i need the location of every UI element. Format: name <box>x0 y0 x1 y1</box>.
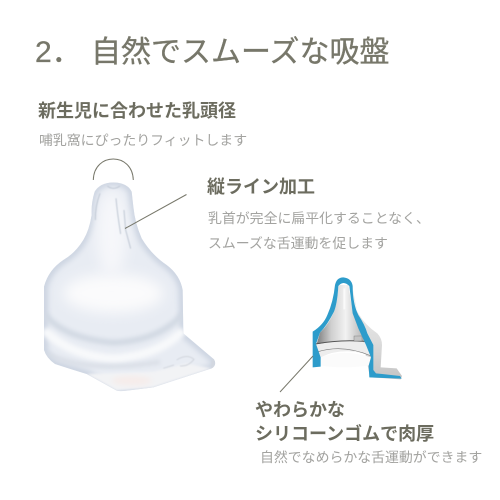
text: fits palate: 哺乳窩にぴったりフィットします <box>39 132 247 148</box>
illustration: cross-section of nipple <box>313 277 402 379</box>
section right outer surface <box>352 285 402 379</box>
section base ring <box>315 341 372 357</box>
section inner dome <box>317 285 365 344</box>
nipple vertical grooves <box>95 186 131 249</box>
section blue silicone wall <box>313 277 402 379</box>
leader line: thick silicone <box>280 356 313 392</box>
heading: soft thick silicone <box>255 400 434 444</box>
illustration: silicone nipple and cross-section <box>44 158 402 392</box>
text: natural tongue movement: 自然でなめらかな舌運動ができます <box>260 449 482 465</box>
nipple body <box>44 182 216 392</box>
heading: soft thick silicone: やわらかな <box>255 400 345 420</box>
text: vertical line description <box>208 210 430 251</box>
text: vertical line description: スムーズな舌運動を促します <box>208 235 388 251</box>
title: 2． <box>35 36 82 69</box>
heading: vertical line processing: 縦ライン加工 <box>207 177 315 197</box>
section centre groove <box>341 288 347 309</box>
nipple tab marking <box>163 356 194 368</box>
leader line: vertical groove <box>125 194 186 228</box>
heading: newborn nipple diameter: 新生児に合わせた乳頭径 <box>38 101 236 121</box>
text: vertical line description: 乳首が完全に扁平化することなく、 <box>208 210 430 226</box>
arc: nipple diameter mark <box>93 159 133 180</box>
heading: soft thick silicone: シリコーンゴムで肉厚 <box>255 424 434 444</box>
title: 自然でスムーズな吸盤 <box>91 36 390 69</box>
